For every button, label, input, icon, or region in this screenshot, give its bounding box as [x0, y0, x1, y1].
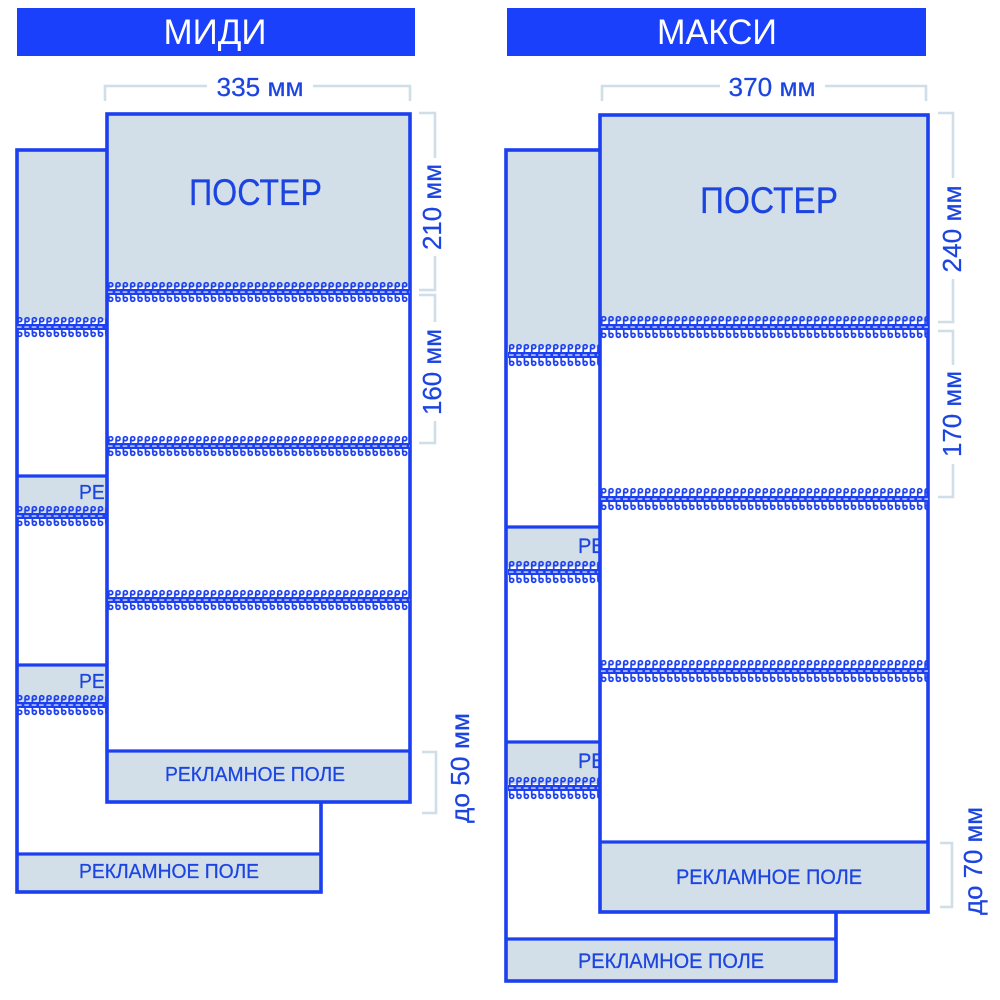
calendar: МИДИ back: РЕКЛАМНОЕ ПОЛЕ — [79, 671, 259, 693]
dimension: 210 мм — [417, 113, 447, 290]
dimension: 370 мм — [602, 72, 926, 102]
dimension: 240 мм: 240 мм — [937, 186, 967, 272]
dimension: 240 мм — [937, 113, 967, 322]
dimension: до 70 мм: до 70 мм — [958, 807, 988, 915]
calendar: МИДИ back: РЕКЛАМНОЕ ПОЛЕ — [79, 482, 259, 504]
calendar: МАКСИ back — [505, 150, 836, 981]
dimension: 335 мм: 335 мм — [216, 72, 304, 102]
calendar: МИДИ front — [106, 114, 410, 802]
calendar: МАКСИ back: РЕКЛАМНОЕ ПОЛЕ — [578, 750, 764, 773]
calendar: МИДИ front: ПОСТЕР — [189, 172, 322, 213]
header: МАКСИ: МАКСИ — [657, 13, 777, 52]
dimension: 210 мм: 210 мм — [417, 164, 447, 250]
calendar: МАКСИ front — [599, 115, 928, 912]
header: МАКСИ — [507, 8, 926, 56]
dimension: 335 мм — [105, 72, 410, 102]
dimension: 160 мм: 160 мм — [417, 329, 447, 415]
calendar: МАКСИ back: РЕКЛАМНОЕ ПОЛЕ — [578, 950, 764, 973]
header: МИДИ — [17, 8, 415, 56]
calendar: МАКСИ back: РЕКЛАМНОЕ ПОЛЕ — [578, 535, 764, 558]
calendar: МИДИ front: РЕКЛАМНОЕ ПОЛЕ — [165, 764, 345, 786]
dimension: до 50 мм — [422, 713, 475, 823]
header: МИДИ: МИДИ — [164, 13, 266, 52]
dimension: 160 мм — [417, 295, 447, 443]
dimension: 170 мм: 170 мм — [937, 371, 967, 457]
calendar: МИДИ back — [16, 150, 321, 892]
dimension: 370 мм: 370 мм — [728, 72, 816, 102]
calendar: МИДИ back: РЕКЛАМНОЕ ПОЛЕ — [79, 861, 259, 883]
dimension: до 70 мм — [940, 807, 988, 915]
calendar: МАКСИ front: ПОСТЕР — [700, 180, 838, 221]
calendar: МАКСИ front: РЕКЛАМНОЕ ПОЛЕ — [676, 866, 862, 889]
dimension: 170 мм — [937, 331, 967, 497]
dimension: до 50 мм: до 50 мм — [445, 713, 475, 823]
